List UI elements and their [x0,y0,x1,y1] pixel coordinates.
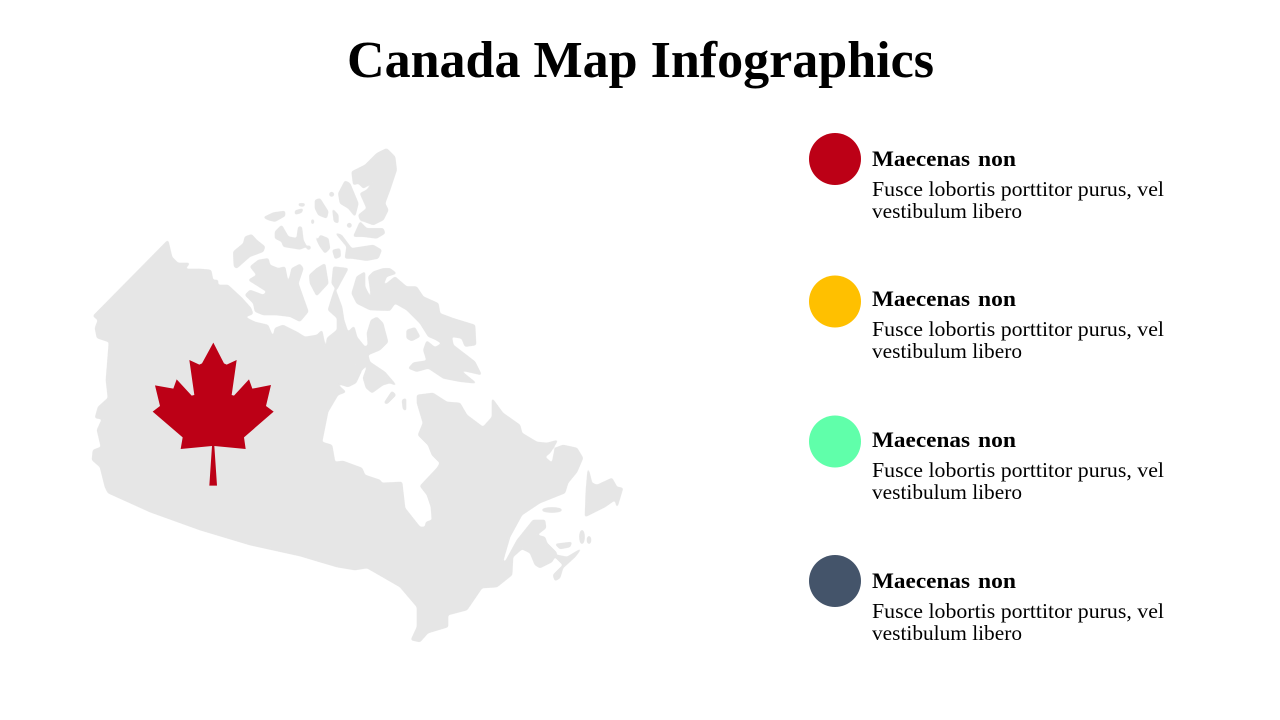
text block 3 [872,458,1164,504]
heading 2: non [978,286,1016,311]
icon: green circle [809,416,861,468]
heading 1: Maecenas [872,146,970,171]
land masses [92,148,623,642]
heading 2: Maecenas [872,286,970,311]
text block 1: vestibulum libero [872,199,1022,223]
mainland [92,240,583,642]
text block 3: Fusce lobortis porttitor purus, vel [872,458,1164,482]
title: Canada Map Infographics [347,32,934,89]
heading 1: non [978,146,1016,171]
heading 4 [872,568,1016,593]
heading 3 [872,427,1016,452]
text block 2 [872,317,1164,363]
maple leaf [153,343,274,486]
text block 4: vestibulum libero [872,621,1022,645]
text block 2: vestibulum libero [872,339,1022,363]
text block 3: vestibulum libero [872,480,1022,504]
text block 4: Fusce lobortis porttitor purus, vel [872,599,1164,623]
icon: red circle [809,133,861,185]
text block 1: Fusce lobortis porttitor purus, vel [872,177,1164,201]
heading 1 [872,146,1016,171]
heading 4: Maecenas [872,568,970,593]
legend item 3 [809,416,1164,504]
arctic islands [233,148,482,383]
hudson bay islands [384,391,406,411]
map: Canada silhouette [92,148,623,642]
icon: slate circle [809,555,861,607]
text block 1 [872,177,1164,223]
icon: yellow circle [809,276,861,328]
text block 2: Fusce lobortis porttitor purus, vel [872,317,1164,341]
atlantic islands [542,467,623,581]
heading 3: Maecenas [872,427,970,452]
legend item 2 [809,276,1164,363]
text block 4 [872,599,1164,645]
heading 3: non [978,427,1016,452]
legend item 4 [809,555,1164,645]
legend item 1 [809,133,1164,223]
heading 4: non [978,568,1016,593]
heading 2 [872,286,1016,311]
